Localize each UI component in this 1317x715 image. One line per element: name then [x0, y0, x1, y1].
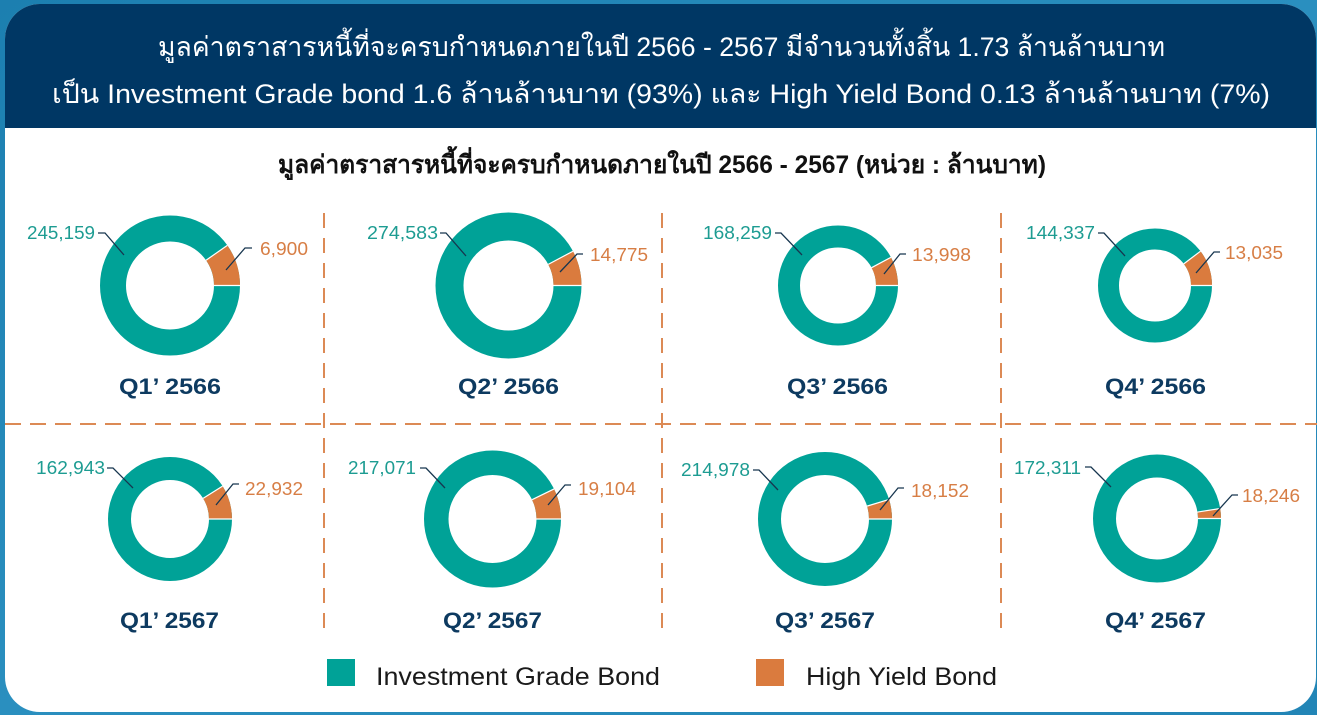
chart heading: มูลค่าตราสารหนี้ที่จะครบกำหนดภายในปี 2566 - 2567 (หน่วย : ล้านบาท)	[278, 145, 1046, 181]
donut: Q3 2566: Q3’ 2566	[787, 374, 888, 399]
legend: Investment Grade Bond	[376, 663, 660, 691]
legend: High Yield Bond	[806, 663, 997, 691]
donut: Q3 2566: 13,998	[912, 245, 971, 265]
donut: Q2 2567	[348, 444, 636, 633]
donut: Q1 2567: 162,943	[36, 458, 105, 478]
legend	[327, 659, 997, 691]
donut: Q2 2567: Q2’ 2567	[443, 608, 542, 633]
donut: Q2 2566: 274,583	[367, 223, 438, 243]
donut: Q2 2566: Q2’ 2566	[458, 374, 559, 399]
donut: Q1 2567	[36, 449, 303, 633]
donut: Q3 2566: 168,259	[703, 223, 772, 243]
donut: Q4 2566	[1026, 220, 1283, 399]
donut: Q3 2566	[703, 219, 971, 399]
donut: Q3 2567: 18,152	[911, 481, 969, 501]
donut: Q2 2566	[367, 206, 648, 399]
donut: Q1 2566: 245,159	[27, 223, 95, 243]
donut: Q4 2566: Q4’ 2566	[1105, 374, 1206, 399]
donut: Q2 2566: 14,775	[590, 245, 648, 265]
donut: Q1 2567: 22,932	[245, 479, 303, 499]
donut: Q3 2567	[681, 450, 969, 633]
donut: Q4 2567: 18,246	[1242, 486, 1300, 506]
title	[52, 27, 1270, 109]
donut: Q4 2567: 172,311	[1014, 458, 1081, 478]
donut: Q4 2566: 13,035	[1225, 243, 1283, 263]
title: เป็น Investment Grade bond 1.6 ล้านล้านบาท (93%) และ High Yield Bond 0.13 ล้านล้านบาท (7%)	[52, 76, 1270, 109]
donut: Q1 2567: Q1’ 2567	[120, 608, 219, 633]
donut: Q4 2566: 144,337	[1026, 223, 1095, 243]
donut: Q1 2566	[27, 206, 308, 399]
donut: Q1 2566: 6,900	[260, 239, 308, 259]
donut: Q2 2567: 217,071	[348, 458, 416, 478]
donut: Q3 2567: 214,978	[681, 460, 750, 480]
donut: Q2 2567: 19,104	[578, 479, 636, 499]
donut: Q4 2567	[1014, 458, 1300, 633]
donut: Q1 2566: Q1’ 2566	[119, 374, 221, 399]
donut: Q4 2567: Q4’ 2567	[1105, 608, 1206, 633]
donut: Q3 2567: Q3’ 2567	[775, 608, 875, 633]
title: มูลค่าตราสารหนี้ที่จะครบกำหนดภายในปี 2566 - 2567 มีจำนวนทั้งสิ้น 1.73 ล้านล้านบาท	[158, 27, 1165, 63]
